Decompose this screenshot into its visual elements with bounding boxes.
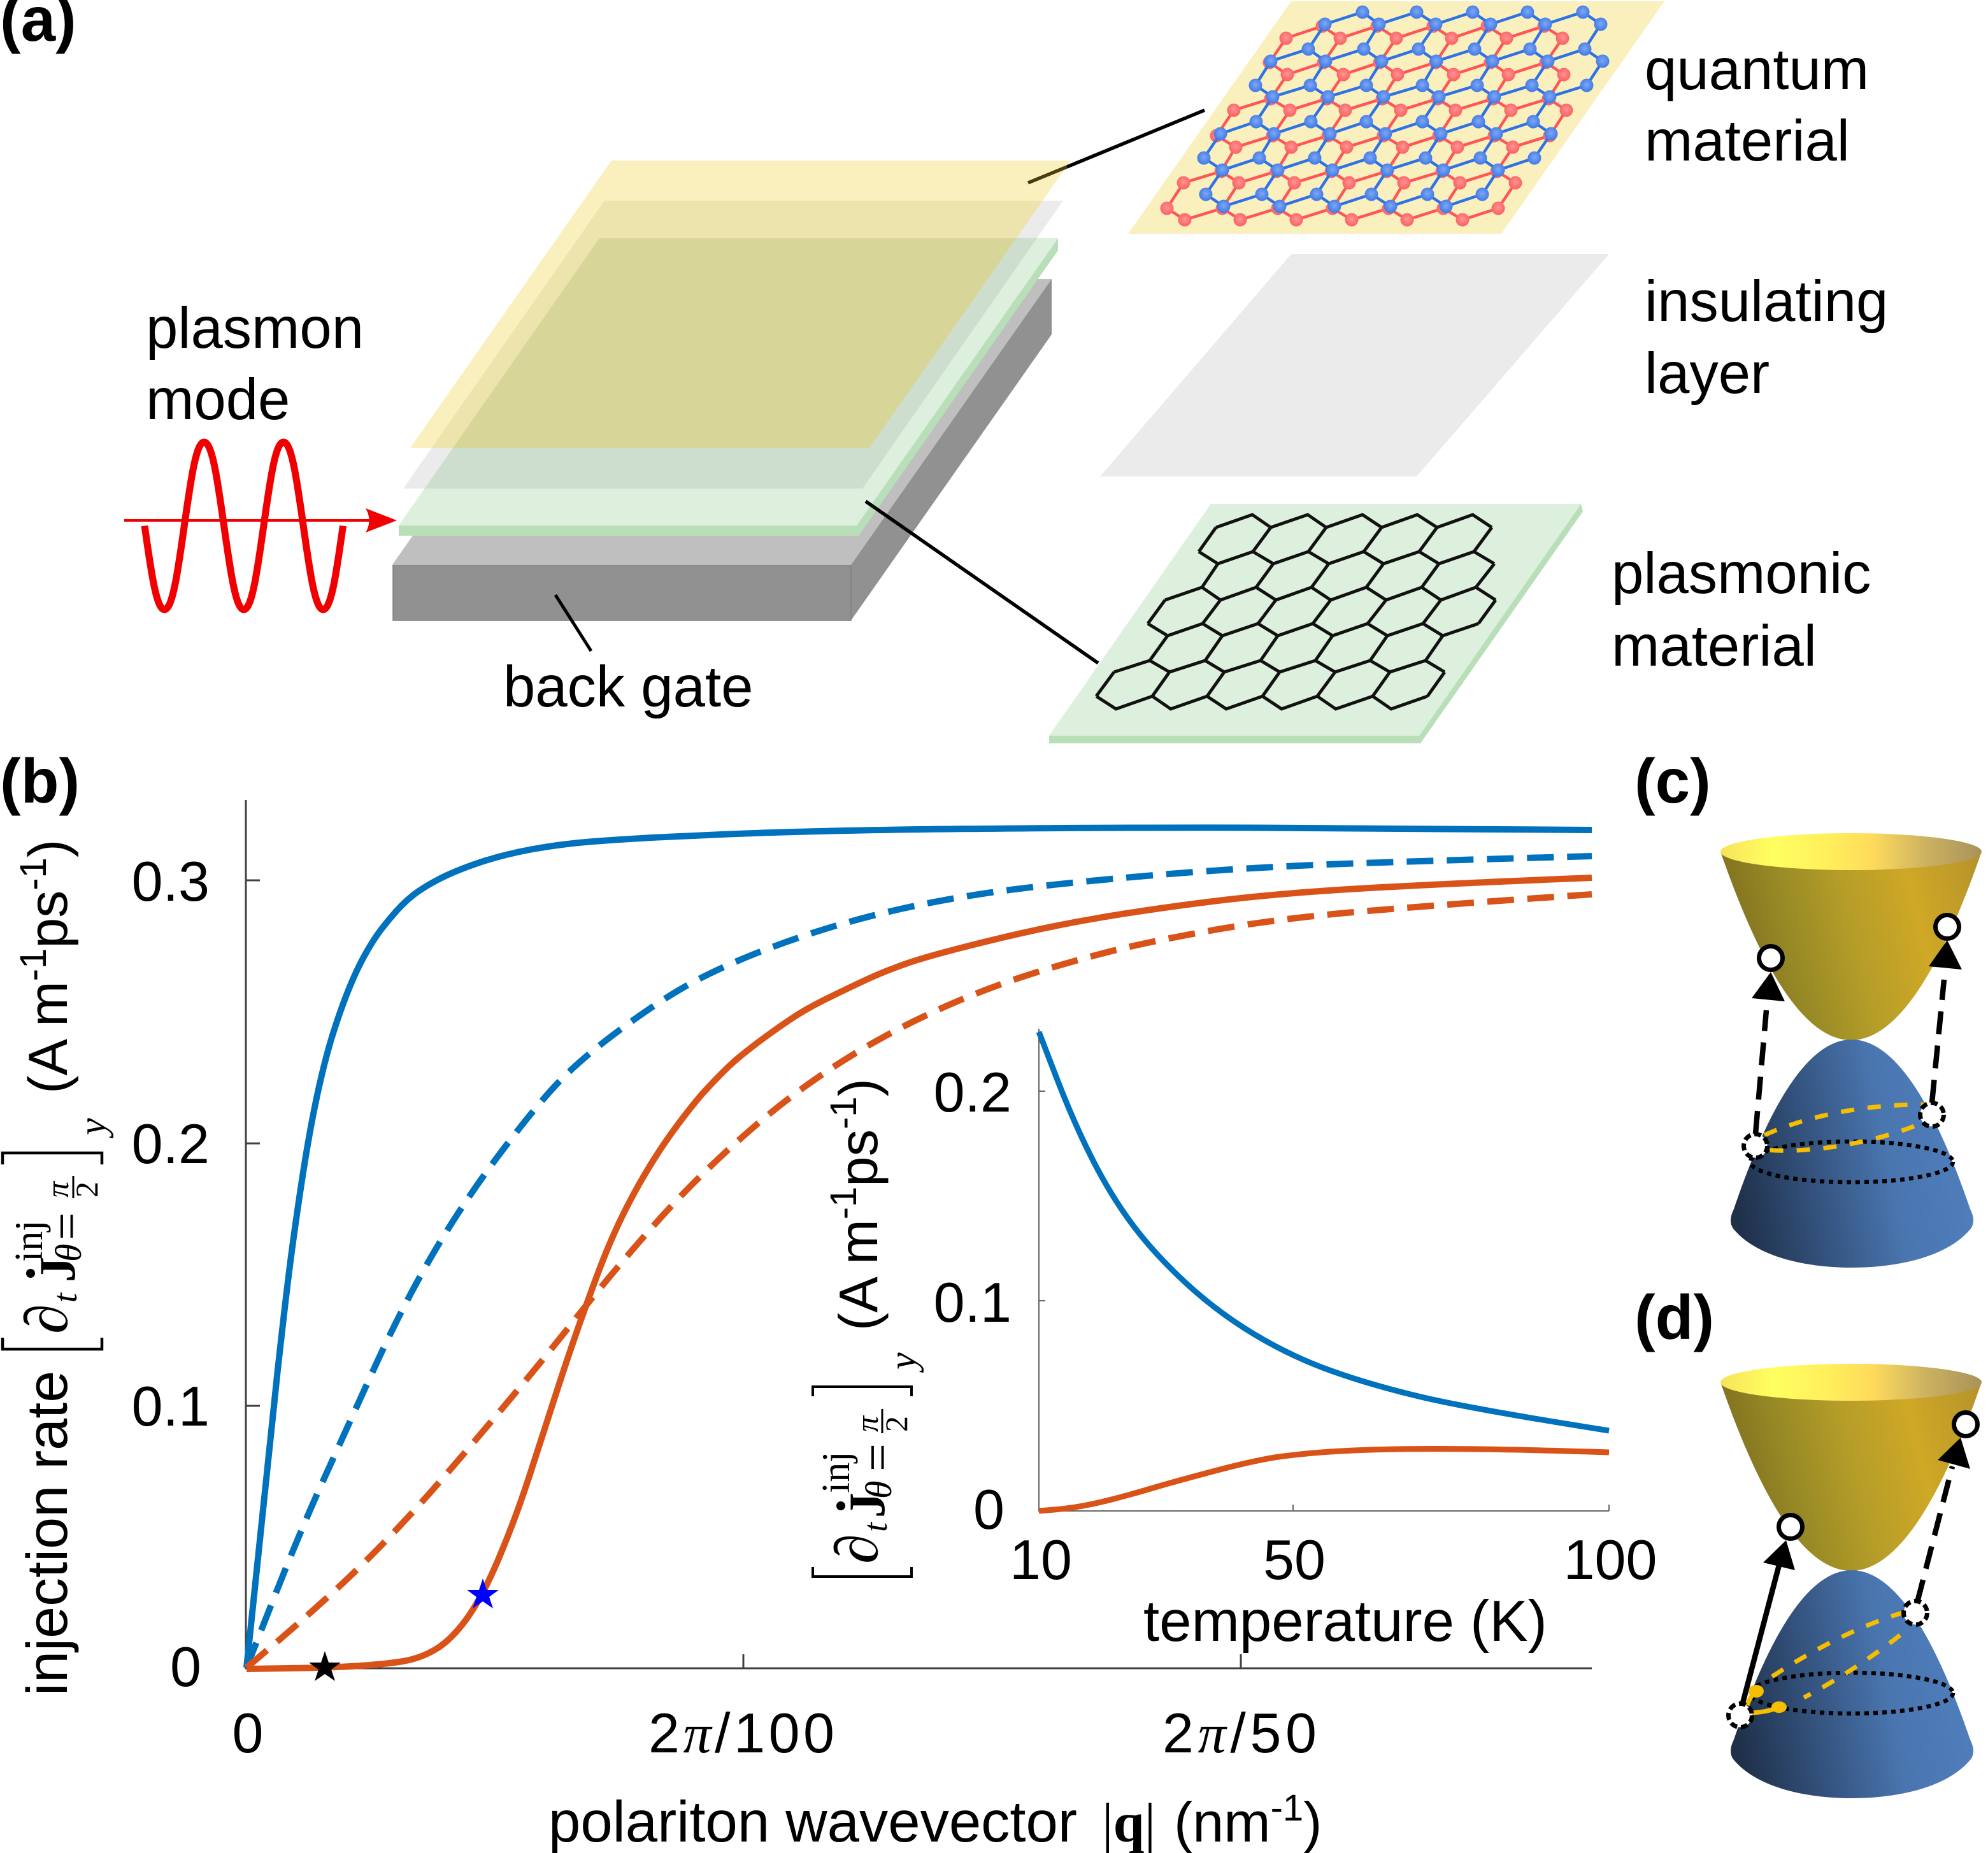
quantum material sheet with lattice (1128, 1, 1664, 234)
device layer stack (392, 161, 1071, 620)
inset y axis title: 2 (878, 1416, 914, 1432)
inset y axis title (813, 1078, 924, 1577)
y axis title: inj (8, 1220, 51, 1262)
valence band cone (1731, 1570, 1973, 1798)
inset x tick labels: 50 (1263, 1528, 1326, 1591)
y axis title: = (39, 1212, 94, 1240)
hole circles (1744, 1103, 1944, 1158)
inset curve: blue (1039, 1032, 1609, 1431)
inset x tick labels (1010, 1528, 1657, 1591)
x tick labels: 0 (232, 1701, 263, 1764)
inset chart: injection rate vs temperature (813, 1029, 1657, 1654)
y tick labels: 0.1 (132, 1375, 210, 1438)
insulating layer sheet (1100, 254, 1609, 476)
conduction band cone (1720, 833, 1982, 1040)
inset x axis title: temperature (K) (1143, 1589, 1547, 1654)
label: insulating layer: insulating (1645, 269, 1888, 334)
label: plasmon mode: plasmon (146, 296, 364, 361)
inset y axis title: t (856, 1521, 894, 1532)
panel d: band cones with transitions (1720, 1364, 1982, 1798)
quantum material layer (410, 161, 1071, 448)
back gate block (392, 279, 1052, 620)
leader line: quantum material (1028, 110, 1205, 183)
label: plasmonic material: material (1612, 614, 1817, 678)
label: back gate: back gate (503, 655, 753, 719)
inset y axis title: = (850, 1443, 905, 1471)
electron circles (1759, 915, 1959, 969)
y axis title: J (30, 1257, 86, 1282)
y tick labels: 0.2 (132, 1112, 210, 1175)
inset y axis title: -1 (823, 1187, 864, 1219)
y axis title: (A m (18, 981, 79, 1094)
panel c: band cones with transitions (1720, 833, 1982, 1268)
label: quantum material (1645, 38, 1869, 173)
y axis title: -1 (13, 948, 54, 981)
y axis title: ps (18, 891, 79, 948)
x axis title: -1 (1271, 1787, 1303, 1829)
y tick labels: 0.3 (132, 850, 210, 913)
y axis title: θ (48, 1243, 89, 1262)
label: quantum material: material (1645, 109, 1850, 173)
label: plasmonic material: plasmonic (1612, 541, 1871, 606)
insulating and quantum overlap (432, 201, 1043, 448)
y axis title (3, 840, 113, 1696)
panel label (d): (d) (1634, 1282, 1714, 1352)
insulating layer (403, 201, 1063, 489)
y axis title: ) (18, 840, 79, 857)
x tick labels: 2π/50 (1162, 1701, 1317, 1765)
valence band cone (1731, 1040, 1973, 1268)
chart: injection rate vs polariton wavevector (3, 800, 1592, 1853)
x axis title: polariton wavevector (548, 1790, 1077, 1853)
curve: blue dashed (247, 856, 1592, 1668)
y axis title: injection rate (16, 1371, 80, 1696)
yellow solid scattering segments (1747, 1685, 1787, 1713)
inset y axis title: (A m (829, 1219, 889, 1331)
yellow dashed scattering path (1764, 1105, 1927, 1150)
dashed transition arrow left (1752, 972, 1785, 1134)
inset y tick labels (934, 1061, 1012, 1541)
y tick labels: 0 (170, 1635, 201, 1698)
inset y axis title: y (882, 1352, 924, 1373)
y axis title: π (39, 1180, 75, 1198)
x tick labels: 2π/100 (648, 1701, 834, 1765)
inset y axis title: ) (829, 1078, 889, 1096)
curve: orange dashed (247, 894, 1592, 1668)
leader line: plasmonic material (866, 501, 1098, 663)
blue lattice (1198, 5, 1609, 213)
icon: blue star (467, 1578, 499, 1608)
inset y axis title: ∂ (823, 1534, 890, 1564)
dashed transition arrow (1917, 1438, 1970, 1602)
curve: blue solid (247, 827, 1592, 1668)
inset y axis title: θ (858, 1480, 899, 1499)
panel label (b): (b) (0, 746, 80, 816)
plasmonic material sheet with hexagons (1049, 504, 1583, 743)
panel label (c): (c) (1634, 746, 1711, 816)
dotted energy contour (1750, 1673, 1953, 1713)
x axis title (548, 1787, 1322, 1853)
inset y axis title: J (840, 1492, 896, 1518)
label: insulating layer (1645, 269, 1888, 406)
inset y axis title: -1 (823, 1096, 864, 1129)
curve: orange solid (247, 878, 1592, 1669)
axes (246, 800, 1592, 1668)
y axis title: -1 (13, 857, 54, 891)
hexagonal lattice (1096, 515, 1496, 709)
inset curve: orange (1039, 1449, 1609, 1511)
yellow dashed scattering path (1772, 1610, 1911, 1698)
y axis title: ∂ (13, 1304, 80, 1334)
icon: plasmon wave with arrow (124, 442, 397, 610)
conduction band cone (1720, 1364, 1982, 1571)
electron circles (1778, 1413, 1977, 1539)
dotted energy contour (1750, 1141, 1953, 1182)
inset x tick labels: 10 (1010, 1528, 1072, 1591)
plasmonic material layer (399, 238, 1058, 536)
icon: black star (309, 1651, 341, 1681)
inset y tick labels: 0 (973, 1478, 1005, 1541)
label: plasmon mode: mode (146, 368, 290, 432)
inset y axis title: π (849, 1415, 885, 1432)
x tick labels (232, 1701, 1317, 1765)
x axis title: ) (1303, 1791, 1322, 1853)
label: plasmon mode (146, 296, 364, 432)
y axis title: 2 (69, 1182, 104, 1198)
inset y tick labels: 0.2 (934, 1061, 1012, 1124)
inset y axis title: ps (829, 1129, 889, 1187)
inset y tick labels: 0.1 (934, 1271, 1012, 1334)
y tick labels (132, 850, 210, 1698)
label: insulating layer: layer (1645, 341, 1770, 406)
inset y axis title: inj (815, 1452, 858, 1493)
inset axes (1039, 1029, 1609, 1511)
label: quantum material: quantum (1645, 38, 1869, 102)
hole circles (1729, 1601, 1927, 1728)
solid transition arrow (1742, 1540, 1795, 1705)
red lattice (1161, 19, 1573, 227)
label: plasmonic material (1612, 541, 1871, 678)
leader line: back gate (555, 595, 591, 651)
y axis title: y (71, 1118, 113, 1139)
x axis title: |q| (1102, 1792, 1155, 1853)
y axis title: t (46, 1292, 84, 1303)
inset x tick labels: 100 (1564, 1528, 1657, 1591)
dashed transition arrow right (1929, 940, 1962, 1103)
x axis title: (nm (1174, 1791, 1271, 1853)
